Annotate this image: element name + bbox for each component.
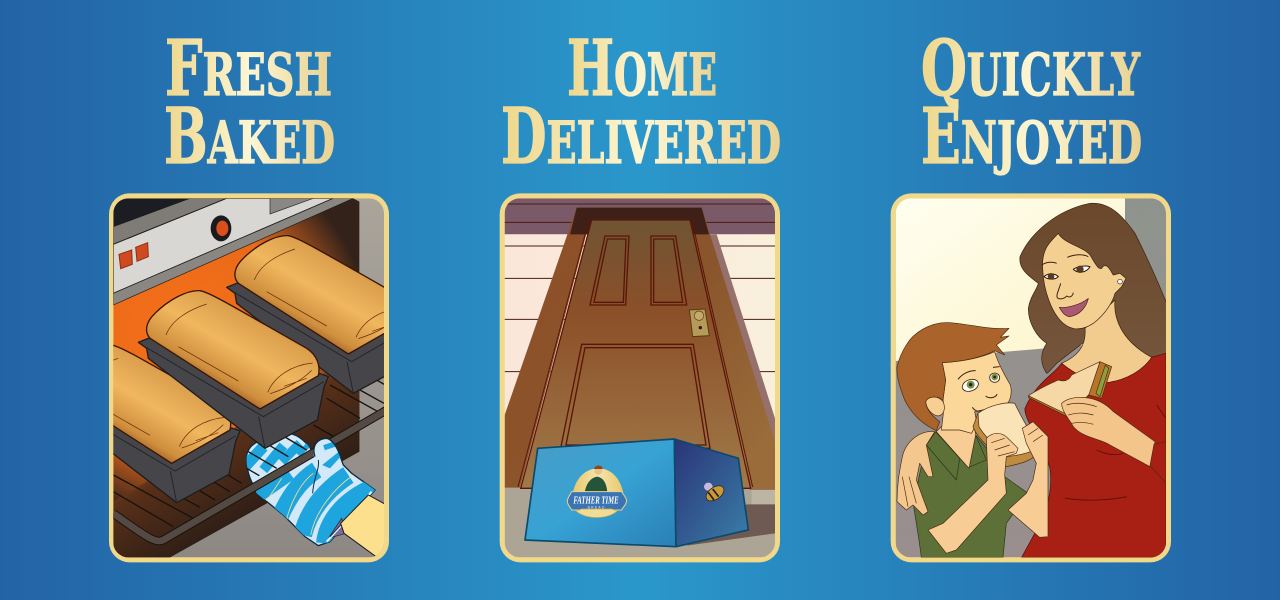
- boy's arms and hands: [928, 422, 1048, 553]
- Father Time Bread logo: [567, 465, 627, 517]
- panel: quickly enjoyed family: [891, 193, 1171, 562]
- mother's arm and hand: [1062, 397, 1166, 483]
- wall: [896, 198, 1166, 557]
- door knob plate: [689, 309, 709, 337]
- icon: oven buttons: [119, 243, 148, 269]
- mother's face: [1042, 233, 1126, 329]
- panel: home delivered door: [500, 193, 780, 562]
- loaf of bread, right: [226, 235, 384, 394]
- mother's hand on boy's shoulder: [897, 431, 935, 515]
- house siding: [505, 198, 775, 491]
- wall shadow: [710, 234, 775, 490]
- heading: Fresh Baked: [164, 24, 335, 182]
- boy's head: [897, 323, 1011, 433]
- rack wires across mitt: [247, 435, 307, 476]
- heading: Quickly Enjoyed: ENJOYED: [921, 92, 1142, 182]
- heading: Home Delivered: [501, 24, 781, 182]
- mother's red dress: [1022, 353, 1166, 557]
- Father Time Bread logo: BREAD: [588, 505, 606, 509]
- mitt thumb in front of bar: [313, 438, 342, 493]
- arm holding rack: [341, 495, 387, 558]
- boy's shirt: [914, 432, 1028, 557]
- oven rack wires: [113, 380, 384, 527]
- boy's neck: [936, 427, 976, 468]
- mitt cuff opening: [328, 518, 346, 538]
- box shadow: [687, 504, 775, 546]
- mother's hair: [1020, 203, 1167, 373]
- loaf of bread, left: [113, 344, 241, 504]
- icon: striped oven mitt: [245, 433, 387, 558]
- heading: Home Delivered: HOME: [567, 24, 717, 114]
- doorstep floor: [505, 487, 775, 557]
- door: [518, 220, 753, 488]
- heading: Home Delivered: DELIVERED: [501, 92, 781, 182]
- Father Time Bread logo: FATHER TIME: [573, 495, 619, 506]
- heading: Fresh Baked: FRESH: [165, 24, 332, 114]
- mother's sandwich: [1028, 362, 1112, 417]
- heading: Fresh Baked: BAKED: [164, 92, 335, 182]
- oven rack front bar: [113, 410, 387, 541]
- icon: oven knob: [211, 215, 231, 241]
- delivery box: [525, 439, 748, 547]
- loaf of bread, centre: [138, 291, 328, 448]
- heading: Quickly Enjoyed: [921, 24, 1142, 182]
- heading: Quickly Enjoyed: QUICKLY: [921, 24, 1140, 114]
- slice of bread: [973, 403, 1041, 467]
- icon: bee: [704, 482, 724, 502]
- panel: fresh baked oven: [109, 193, 389, 562]
- mother's neck and chest: [1062, 300, 1152, 383]
- door frame: [505, 208, 775, 489]
